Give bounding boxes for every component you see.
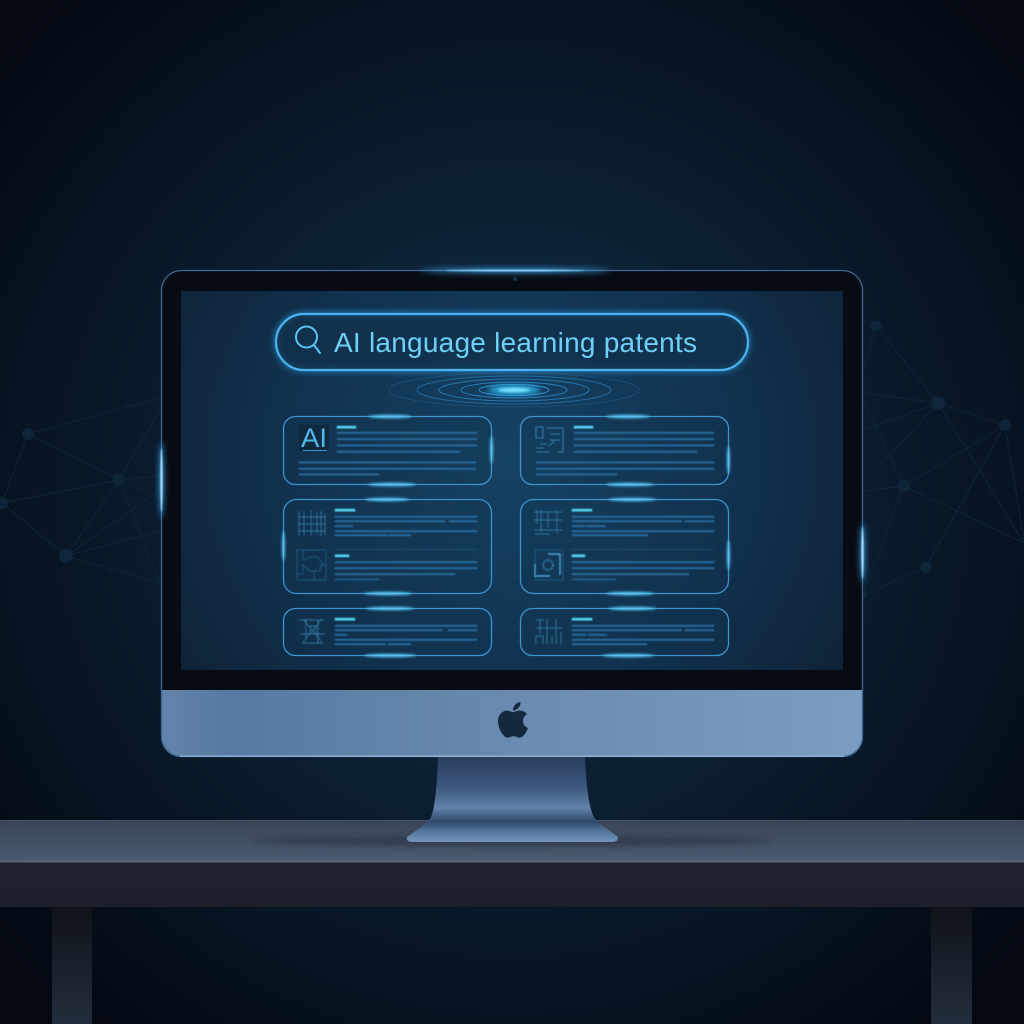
network graph: right [859,320,1024,599]
card text lines [572,509,714,580]
network graph: left [0,398,160,583]
card glows [602,607,656,657]
monitor body [161,270,863,757]
monitor chin [161,690,863,757]
result card 5 [284,607,492,657]
result card 6 [520,607,728,657]
monitor [160,268,864,842]
icon: cross diagram [299,619,325,644]
result card 2 [520,415,730,486]
card glows [364,607,416,657]
card glows [606,415,730,486]
search bar [276,314,748,370]
card text lines [536,426,714,475]
result card 1 [284,415,493,486]
result card 4 [520,498,730,595]
apple logo [498,702,528,738]
webcam [513,277,517,281]
card text lines [299,426,477,475]
card glows [368,415,493,486]
desk [0,820,1024,907]
card glows [282,498,412,595]
card text lines [335,509,477,580]
ripple glow [389,373,639,407]
result card 3 [282,498,492,595]
icon: AI: AI [301,423,327,453]
icon: bracket diagram [536,619,562,644]
monitor rim [162,270,862,756]
chin bottom highlight [180,756,844,757]
icon: circuit diagram [298,510,326,536]
card glows [606,498,730,595]
icon: schematic [534,510,562,534]
desk legs [52,907,972,1024]
icon: flow diagram [297,550,326,580]
monitor stand [407,757,618,842]
card text lines [335,618,477,645]
search query: AI language learning patents [334,327,697,358]
card text lines [572,618,714,645]
screen [181,291,843,670]
icon: gear frame [535,550,563,580]
rim glows [160,268,864,583]
icon: magnifier [296,326,320,353]
icon: patent diagram [536,427,563,452]
